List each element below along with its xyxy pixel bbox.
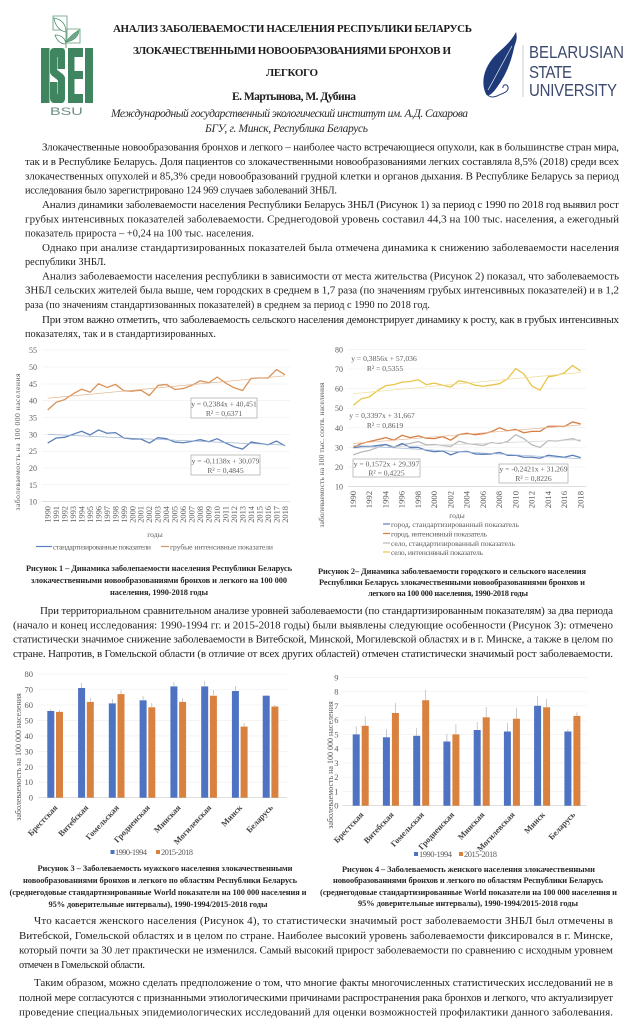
chart: figure 3 bar chart: Витебская (57, 803, 91, 838)
chart: figure 4 bar chart: Брестская (332, 810, 366, 845)
chart: figure 4 bar chart: Витебская (362, 810, 396, 845)
chart: figure 1 line chart: 2014 (247, 505, 256, 523)
text block: introduction: При этом важно отметить, что заболеваемость сельского населения демонстрирует динамику к росту, как в грубых интенсивных (42, 314, 620, 326)
chart: figure 4 bar chart: 9 (334, 672, 338, 682)
chart: figure 1 line chart: 2007 (188, 506, 197, 523)
chart: figure 3 bar chart: 0 (29, 793, 33, 803)
text block: territorial analysis (13, 605, 614, 660)
text block: female population and conclusion: Таким образом, можно сделать предположение о том, что многие факты многочисленных статистических исследований не в (34, 977, 613, 989)
chart: figure 4 bar chart: Могилевская (475, 810, 517, 854)
text block: female population and conclusion: отмечен в Гомельской области. (19, 960, 145, 971)
chart: figure 1 line chart: 1992 (60, 506, 70, 523)
chart: figure 1 line chart: 1996 (94, 506, 103, 523)
chart: figure 1 line chart: 1994 (77, 505, 86, 523)
logo: Belarusian State University: UNIVERSITY (529, 80, 617, 100)
chart: figure 1 line chart: 1991 (52, 506, 61, 523)
chart: figure 1 line chart: 2000 (128, 506, 137, 523)
chart: figure 1 line chart (13, 346, 290, 552)
affiliation: БГУ, г. Минск, Республика Беларусь (204, 123, 368, 135)
logo: Belarusian State University: BELARUSIAN (529, 42, 624, 62)
chart: figure 2 line chart (317, 345, 586, 557)
title (113, 23, 472, 79)
chart: figure 2 line chart: 10 (335, 483, 343, 492)
chart: figure 1 line chart: 2001 (137, 506, 146, 523)
chart: figure 2 line chart: город, интенсивный показатель (391, 530, 488, 538)
chart: figure 1 line chart: R² = 0,4845 (207, 466, 244, 475)
chart: figure 1 line chart: y = 0,2384x + 40,451 (191, 400, 257, 408)
text block: introduction: раза (по значениям стандартизованных показателей) в среднем за период с 1990 по 2018 год. (25, 300, 430, 311)
chart: figure 3 bar chart: 50 (24, 715, 33, 725)
chart: figure 2 line chart: R² = 0,5355 (367, 364, 403, 373)
caption: figure 3 (10, 864, 307, 909)
title: АНАЛИЗ ЗАБОЛЕВАЕМОСТИ НАСЕЛЕНИЯ РЕСПУБЛИКИ БЕЛАРУСЬ (113, 23, 472, 35)
chart: figure 3 bar chart: Брестская (26, 803, 60, 838)
chart: figure 3 bar chart: 70 (24, 684, 33, 694)
text block: female population and conclusion: проведение специальных эпидемиологических исследований для оценки возможностей профилактики данного заболевания. (19, 1006, 613, 1018)
chart: figure 1 line chart: 55 (29, 346, 37, 355)
chart: figure 2 line chart: 2002 (446, 491, 456, 508)
chart: figure 2 line chart: 80 (335, 345, 343, 354)
chart: figure 2 line chart: y = -0,2421x + 31,269 (499, 464, 568, 474)
chart: figure 4 bar chart: 2015-2018 (464, 849, 497, 859)
caption: figure 1: злокачественными новообразованиями бронхов и легкого на 100 000 (31, 576, 287, 585)
chart: figure 4 bar chart: Гомельская (389, 810, 426, 849)
caption: figure 2: легкого на 100 000 населения, 1990-2018 годы (368, 589, 528, 598)
logo: Belarusian State University: STATE (529, 62, 572, 82)
chart: figure 3 bar chart: 30 (24, 746, 33, 756)
text block: territorial analysis: (начало и конец исследования: 1990-1994 гг. и 2015-2018 годы) были выявлены следующие особенности (Рисунок 3): отмечено (13, 619, 614, 631)
text block: introduction: показателях, так и в стандартизированных. (25, 329, 216, 340)
chart: figure 2 line chart: 30 (335, 444, 343, 452)
affiliation: Международный государственный экологический институт им. А.Д. Сахарова (110, 107, 468, 120)
chart: figure 1 line chart: 25 (29, 447, 37, 456)
chart: figure 1 line chart: заболеваемость на 100 000 населения (13, 373, 22, 510)
chart: figure 4 bar chart: 4 (334, 744, 339, 754)
chart: figure 1 line chart: 2006 (179, 506, 188, 523)
chart: figure 1 line chart: 50 (29, 363, 37, 372)
chart: figure 4 bar chart: 7 (334, 701, 338, 711)
chart: figure 2 line chart: 2018 (576, 491, 586, 508)
text block: introduction: Анализ заболеваемости населения республики в зависимости от места жительства (Рисунок 2) показал, что заболеваемость (42, 270, 619, 282)
chart: figure 3 bar chart: Гродненская (112, 803, 152, 845)
chart: figure 2 line chart: 1990 (348, 491, 358, 508)
chart: figure 3 bar chart: 10 (24, 777, 33, 787)
chart: figure 3 bar chart: 80 (24, 669, 33, 679)
chart: figure 1 line chart: 1993 (69, 506, 78, 523)
chart: figure 3 bar chart (14, 669, 287, 857)
chart: figure 2 line chart: 60 (335, 385, 343, 394)
chart: figure 2 line chart: 1994 (380, 490, 390, 508)
title: ЗЛОКАЧЕСТВЕННЫМИ НОВООБРАЗОВАНИЯМИ БРОНХОВ И (133, 45, 451, 57)
chart: figure 2 line chart: город, стандартизированный показатель (391, 520, 520, 529)
affiliation (110, 107, 468, 135)
logo: ISEI BSU: BSU (50, 105, 83, 117)
chart: figure 2 line chart: 1992 (364, 491, 374, 508)
text block: introduction: Однако при анализе стандартизированных показателей была отмечена динамика к снижению заболеваемости населения (42, 242, 619, 254)
chart: figure 1 line chart: 30 (29, 430, 37, 439)
chart: figure 4 bar chart: Гродненская (417, 810, 456, 852)
chart: figure 2 line chart: 20 (335, 463, 343, 472)
caption: figure 1 (26, 564, 293, 597)
chart: figure 1 line chart: R² = 0,6371 (206, 409, 242, 418)
chart: figure 1 line chart: 2012 (230, 506, 239, 523)
chart: figure 1 line chart: 2015 (255, 506, 264, 523)
chart: figure 1 line chart: 20 (29, 464, 37, 473)
chart: figure 2 line chart: y = 0,1572x + 29,397 (354, 460, 419, 468)
caption: figure 3: новообразованиями бронхов и легкого по областям Республики Беларусь (23, 876, 298, 885)
chart: figure 2 line chart: R² = 0,8619 (367, 421, 403, 430)
chart: figure 4 bar chart: 3 (334, 758, 338, 768)
chart: figure 4 bar chart: Минск (522, 810, 547, 835)
caption: figure 4: новообразованиями бронхов и легкого по областям Республики Беларусь (333, 876, 604, 885)
chart: figure 1 line chart: 1999 (120, 506, 129, 523)
chart: figure 2 line chart: R² = 0,8226 (515, 474, 552, 483)
chart: figure 2 line chart: R² = 0,4225 (368, 468, 405, 478)
chart: figure 1 line chart: 35 (29, 414, 37, 422)
chart: figure 1 line chart: 45 (29, 380, 37, 389)
chart: figure 4 bar chart: заболеваемость на 100 000 населения (326, 701, 335, 829)
chart: figure 1 line chart: 1995 (86, 506, 95, 523)
chart: figure 4 bar chart: 6 (334, 715, 338, 725)
chart: figure 1 line chart: 2013 (238, 506, 247, 523)
authors: Е. Мартынова, М. Дубина (232, 91, 356, 103)
text block: territorial analysis: стране. Напротив, в Гомельской области (в отличие от всех других областей) отмечен статистически значимый рост заболеваемости. (13, 648, 613, 660)
text block: introduction: так и в Республике Беларусь. Доля пациентов со злокачественными новообразованиями легких составляла 8,5% (2018) среди всех (25, 156, 620, 168)
text block: introduction: ЗНБЛ сельских жителей была выше, чем городских в среднем в 1,7 раза (по значениям грубых интенсивных показателей) и в 1,2 (25, 284, 619, 296)
caption: figure 2: Республики Беларусь злокачественными новообразованиями бронхов и (319, 578, 585, 587)
caption: figure 1: населения, 1990-2018 годы (110, 588, 208, 597)
text block: introduction: Анализ динамики заболеваемости населения Республики Беларусь ЗНБЛ (Рисунок 1) за период с 1990 по 2018 год выявил рост (42, 199, 619, 211)
chart: figure 4 bar chart: 1990-1994 (419, 849, 453, 859)
caption: figure 2 (318, 567, 586, 598)
caption: figure 4: Рисунок 4 – Заболеваемость женского населения злокачественными (342, 865, 595, 874)
text block: introduction (25, 142, 620, 340)
caption: figure 4: 95% доверительные интервалы), 1990-1994/2015-2018 годы (358, 899, 578, 908)
text block: territorial analysis: При территориальном сравнительном анализе уровней заболеваемости (по стандартизированным показателям) за два периода (40, 605, 613, 617)
chart: figure 2 line chart: 40 (335, 424, 343, 433)
chart: figure 2 line chart: годы (449, 511, 465, 520)
caption: figure 4 (320, 865, 617, 908)
chart: figure 2 line chart: 50 (335, 404, 343, 413)
chart: figure 2 line chart: заболеваемость на 100 тыс. соотв. населения (317, 382, 326, 527)
chart: figure 2 line chart: 70 (335, 365, 343, 374)
text block: female population and conclusion (19, 915, 613, 1018)
chart: figure 3 bar chart: 1990-1994 (115, 847, 148, 857)
text block: introduction: грубых интенсивных показателей заболеваемости. Среднегодовой уровень составил 44,3 на 100 тыс. населения, а ежегодный (25, 213, 619, 225)
caption: figure 4: (среднегодовые стандартизированные World показатели на 100 000 населения и (320, 888, 617, 897)
text block: introduction: Злокачественные новообразования бронхов и легкого – наиболее часто встречающиеся опухоли, как в большинстве стран мира, (42, 142, 619, 154)
chart: figure 1 line chart: 1990 (44, 506, 52, 523)
text block: introduction: исследования было зарегистрировано 124 969 случаев заболеваний ЗНБЛ. (25, 186, 337, 197)
chart: figure 2 line chart: 2010 (510, 491, 520, 508)
text block: territorial analysis: статистически значимое снижение заболеваемости в Витебской, Минской, Могилевской областях и в г. Минске, а также в целом по (13, 634, 614, 646)
caption: figure 3: (среднегодовые стандартизированные World показатели на 100 000 населения и (10, 888, 307, 897)
chart: figure 1 line chart: стандартизированные показатели (53, 542, 151, 552)
chart: figure 1 line chart: 15 (29, 481, 37, 490)
chart: figure 1 line chart: годы (147, 530, 163, 539)
chart: figure 3 bar chart: Могилевская (172, 803, 214, 847)
text block: female population and conclusion: полной мере согласуются с признанными этиологическими причинами распространения рака бронхов и легкого, что актуализирует (19, 992, 613, 1004)
caption: figure 3: Рисунок 3 – Заболеваемость мужского населения злокачественными (38, 864, 293, 873)
chart: figure 4 bar chart: 5 (334, 729, 338, 739)
chart: figure 3 bar chart: 60 (24, 700, 33, 710)
chart: figure 3 bar chart: заболеваемость на 100 000 населения (14, 693, 23, 821)
chart: figure 2 line chart: 2008 (494, 491, 504, 508)
chart: figure 3 bar chart: 2015-2018 (161, 847, 193, 857)
chart: figure 2 line chart: село, интенсивный показатель (391, 548, 484, 557)
chart: figure 1 line chart: 2017 (272, 506, 281, 523)
chart: figure 2 line chart: 1996 (397, 490, 407, 508)
text block: introduction: показатель прироста – +0,24 на 100 тыс. населения. (25, 228, 254, 240)
chart: figure 1 line chart: 40 (29, 397, 37, 406)
chart: figure 1 line chart: 2004 (162, 505, 171, 523)
logo: Belarusian State University (483, 32, 624, 100)
text block: female population and conclusion: Что касается женского населения (Рисунок 4), то статистически значимый рост заболеваемости ЗНБЛ был отмечены в (34, 915, 613, 927)
chart: figure 3 bar chart: Беларусь (245, 803, 275, 835)
chart: figure 1 line chart: 1997 (103, 506, 112, 523)
chart: figure 1 line chart: 2018 (281, 506, 290, 523)
chart: figure 3 bar chart: Минск (220, 803, 244, 828)
chart: figure 1 line chart: 2011 (222, 506, 230, 522)
chart: figure 4 bar chart: 2 (334, 772, 338, 782)
chart: figure 1 line chart: 2002 (145, 506, 154, 523)
chart: figure 2 line chart: 2004 (462, 490, 472, 508)
chart: figure 2 line chart: y = 0,3856x + 57,036 (351, 354, 417, 363)
chart: figure 4 bar chart: 1 (334, 786, 338, 796)
chart: figure 1 line chart: 10 (29, 498, 37, 507)
chart: figure 2 line chart: 2014 (543, 490, 553, 508)
chart: figure 1 line chart: 2009 (204, 506, 214, 523)
chart: figure 2 line chart: y = 0,3397x + 31,667 (349, 411, 415, 420)
chart: figure 2 line chart: 1998 (413, 491, 423, 508)
text block: introduction: республики ЗНБЛ. (25, 257, 106, 268)
title: ЛЕГКОГО (266, 67, 318, 79)
chart: figure 4 bar chart (326, 672, 587, 859)
chart: figure 4 bar chart: Беларусь (547, 810, 578, 842)
chart: figure 2 line chart: 2012 (527, 491, 537, 508)
chart: figure 3 bar chart: 40 (24, 731, 33, 741)
chart: figure 1 line chart: 2003 (154, 506, 163, 523)
chart: figure 1 line chart: 1998 (111, 506, 120, 523)
chart: figure 3 bar chart: Гомельская (84, 803, 121, 842)
chart: figure 4 bar chart: 8 (334, 687, 338, 697)
logo: ISEI BSU (41, 16, 93, 117)
chart: figure 2 line chart: село, стандартизированный показатель (391, 539, 516, 548)
chart: figure 1 line chart: 2010 (213, 506, 222, 523)
chart: figure 4 bar chart: 0 (334, 801, 338, 811)
caption: figure 1: Рисунок 1 – Динамика заболепаемости населения Республики Беларусь (26, 564, 293, 573)
chart: figure 2 line chart: 2016 (559, 490, 569, 508)
chart: figure 1 line chart: y = -0,1138x + 30,079 (192, 456, 260, 466)
chart: figure 1 line chart: грубые интенсивные показатели (170, 542, 273, 552)
chart: figure 2 line chart: 2000 (429, 491, 439, 508)
chart: figure 3 bar chart: 20 (24, 762, 33, 772)
chart: figure 1 line chart: 2016 (264, 506, 273, 523)
text block: female population and conclusion: Витебской, Гомельской областях и в целом по стране. Наиболее высокий уровень заболеваемости фиксировался в г. Минске, (19, 930, 613, 942)
text block: introduction: злокачественных опухолей и 85,3% среди новообразований грудной клетки и органов дыхания. В Республике Беларусь за период (25, 170, 619, 182)
chart: figure 4 bar chart: Минская (456, 810, 487, 842)
chart: figure 1 line chart: 2008 (196, 506, 205, 523)
chart: figure 2 line chart: 2006 (478, 490, 488, 508)
text block: female population and conclusion: который почти за 30 лет практически не изменился. Самый высокий прирост заболеваемости по сравнению с исходным уровнем (19, 944, 613, 956)
caption: figure 2: Рисунок 2– Динамика заболеваемости городского и сельского населения (318, 567, 586, 576)
chart: figure 1 line chart: 2005 (171, 506, 180, 523)
caption: figure 3: 95% доверительные интервалы), 1990-1994/2015-2018 годы (48, 900, 268, 909)
chart: figure 3 bar chart: Минская (152, 803, 183, 835)
